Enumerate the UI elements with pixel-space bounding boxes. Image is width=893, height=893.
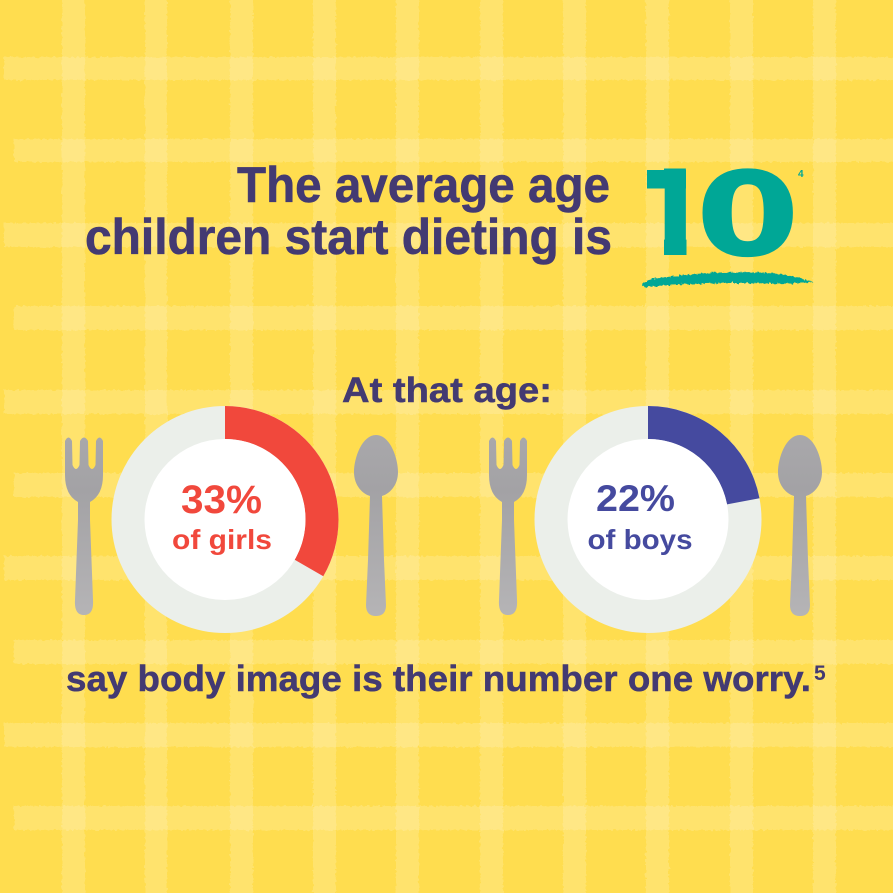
subheading: at that age: At that age: xyxy=(342,371,552,410)
heading: average dieting age: The average age xyxy=(237,157,610,213)
heading: average dieting age xyxy=(85,157,612,265)
donut chart: girls 33%: 33% xyxy=(181,478,262,522)
icon: spoon right xyxy=(778,435,822,616)
icon: fork left xyxy=(65,438,103,615)
donut chart: boys 22%: of boys xyxy=(588,524,692,555)
big number 10: 0 xyxy=(696,148,799,283)
donut chart: boys 22% xyxy=(534,406,762,633)
brush underline xyxy=(642,272,813,287)
big number 10: 4 xyxy=(798,169,804,180)
big number 10 xyxy=(647,168,804,258)
donut chart: girls 33%: of girls xyxy=(172,524,272,555)
closing statement: say body image is their number one worry. xyxy=(66,658,811,699)
heading: average dieting age: children start dieting is xyxy=(85,209,612,265)
donut chart: boys 22%: 22% xyxy=(596,478,675,519)
icon: spoon left xyxy=(354,435,398,616)
donut chart: girls 33% xyxy=(112,406,339,633)
footnote marker 5: 5 xyxy=(814,662,826,685)
big number 10: 1 xyxy=(631,146,714,284)
icon: fork right xyxy=(489,438,527,615)
